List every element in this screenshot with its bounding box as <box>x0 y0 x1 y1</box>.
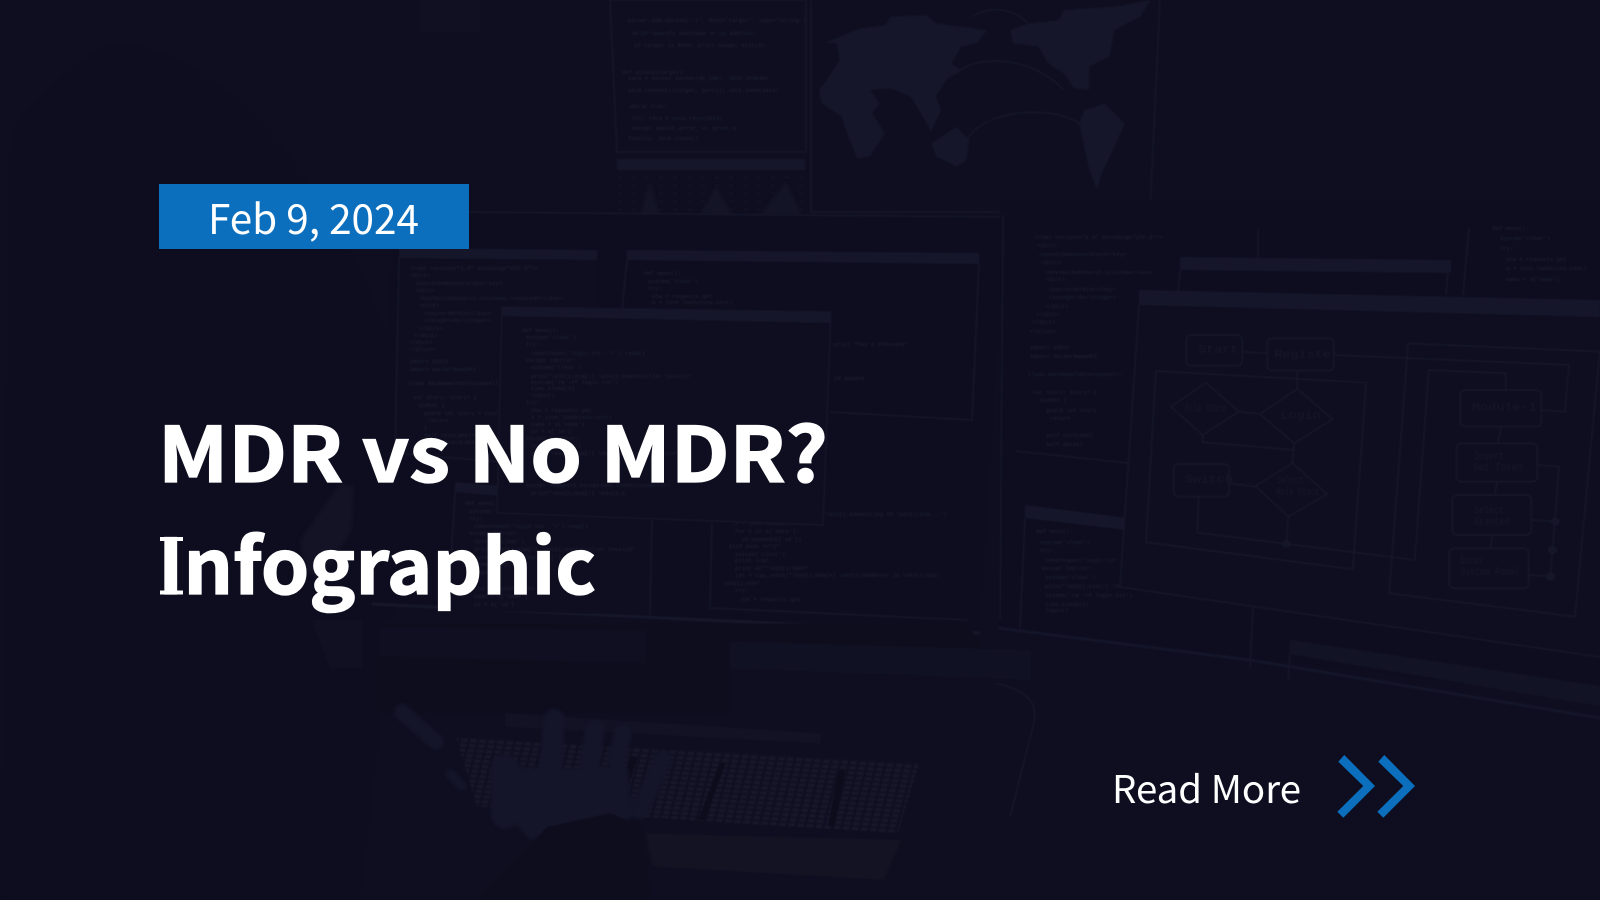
background: xml code panel: class HackNewsTableViewCell: U <box>408 380 509 387</box>
background: xml code panel: return <box>428 417 448 424</box>
title <box>158 394 828 616</box>
flowchart: Module-1 <box>1472 402 1537 414</box>
background: lower python panel: system('clear') <box>474 538 524 545</box>
xml panel on right monitor: <dict> <box>1045 276 1066 283</box>
background: centre code window: system('clear') <box>526 334 576 341</box>
background: upper python panel <box>622 250 979 420</box>
xml panel on right monitor: <dict> <box>1037 242 1058 249</box>
xml panel on right monitor: class HackNewsTableViewCell: <box>1028 371 1122 378</box>
background: centre code window: print"\033[1;91m[!] \033[1;9 <box>531 490 625 497</box>
top right python code: def menu(): <box>1492 225 1529 232</box>
background: centre code window: except requests.exceptions.ConnectionError: <box>526 482 670 489</box>
background: right monitor with flowchart: try: <box>1040 547 1053 554</box>
background: centre code window: nama = a['name'] <box>531 421 585 428</box>
background: upper code monitor: try: recv = sock.recv(1024) <box>632 115 723 122</box>
hand <box>402 712 663 840</box>
xml panel on right monitor: import HackerNewsAPI <box>1030 353 1097 360</box>
background: upper python panel: def menu(): <box>644 270 681 277</box>
background: upper code monitor: finally: sock.close() <box>628 135 698 142</box>
background: upper code monitor: sock = socket.socket(AF_INET, SOCK_STREAM) <box>628 75 769 82</box>
background: lower python panel: id = a['id'] <box>474 601 514 608</box>
behind panel header <box>1180 257 1451 273</box>
title: MDR vs No MDR? <box>158 394 828 504</box>
background: xml code panel: <dict> <box>415 287 436 294</box>
background: lower right code panel: elif peak =="2": <box>729 543 783 550</box>
background: centre code window: except IOError: <box>526 357 576 364</box>
background: upper code monitor: if target is None: print usage; exit(0) <box>634 42 765 49</box>
xml panel on right monitor: <key>orderHint</key> <box>1049 286 1117 293</box>
flowchart: Select <box>1474 504 1504 517</box>
background: right monitor with flowchart: def menu(): <box>1036 528 1073 535</box>
background: lower python panel: try: <box>469 515 482 522</box>
background: upper code monitor: def attack(target): <box>622 69 686 76</box>
background: right monitor with flowchart: except IOError: <box>1042 565 1092 572</box>
background: centre code window: print"\033[1;91m[!] \033[1;91mInstaller Invalid" <box>531 373 692 380</box>
background: xml code panel: import HackerNewsAPI <box>409 366 476 373</box>
background: centre code window: a = json.loads(otw.text) <box>531 414 612 421</box>
background: centre code window: login() <box>531 392 554 399</box>
top right python code: nama = a['name'] <box>1506 276 1560 283</box>
background: lower python panel: print"\033[1;91m[!] \033[1;91mInstaller Invalid" <box>474 546 635 553</box>
xml panel on right monitor: <dict> <box>1041 259 1062 266</box>
background: centre code window: system('clear') <box>531 442 581 449</box>
background: lower python panel: system('clear') <box>469 508 519 515</box>
sleeve <box>477 813 652 900</box>
flowchart: Register <box>1274 348 1339 361</box>
lower left panel header <box>1025 505 1128 530</box>
flowchart: Enter <box>1460 554 1484 567</box>
flowchart window <box>1120 290 1600 706</box>
background: lower right code panel: \033[1;97m" <box>723 580 760 587</box>
background: xml code panel: <integer>6</integer> <box>424 317 492 324</box>
background: lower python panel <box>448 482 652 615</box>
background: xml code panel: <dict> <box>410 272 431 279</box>
background: lower python panel: time.sleep(1) <box>474 561 518 568</box>
background: upper python panel: id.append <box>834 375 864 382</box>
background: lower right code panel <box>710 511 968 620</box>
background: upper python panel: system('clear') <box>648 278 698 285</box>
background: upper python panel: a = json.loads(otw.text) <box>652 299 733 306</box>
top right python code: otw = requests.get <box>1506 256 1566 263</box>
background: desk and keyboard <box>379 623 1035 880</box>
palm rest <box>645 833 901 880</box>
background: centre code window <box>497 307 831 525</box>
background: main monitor bezel <box>372 212 1005 640</box>
background: xml code panel: guard let story = story <box>424 410 502 417</box>
background: lower right code panel: print 42*"\033[1;96m=" <box>735 565 809 572</box>
background: lower python panel: otw = requests.get <box>474 585 534 592</box>
background: lower python panel: except IOError: <box>469 530 519 537</box>
background: lower python panel: try: <box>469 577 482 584</box>
background: lower right code panel: print logo <box>735 557 769 564</box>
xml panel on right monitor: </plist> <box>1030 328 1057 335</box>
xml panel on right monitor: guard let story <box>1046 407 1097 414</box>
background: lower right code panel: system('clear') <box>735 551 785 558</box>
flowchart: Role State <box>1185 403 1226 415</box>
background: centre code window: otw = requests.get <box>531 407 591 414</box>
background: lower python panel: system('rm -rf login.txt') <box>474 554 561 561</box>
background: xml code panel: self.textLabel?.text <box>424 432 491 439</box>
background: world map monitor <box>811 0 1160 212</box>
flowchart: Select <box>1276 474 1304 487</box>
background: right monitor with flowchart: login() <box>1045 607 1068 614</box>
background: xml code panel: </dict> <box>409 339 433 346</box>
background: xml code panel: import UIKit <box>409 358 449 365</box>
background: centre code window: system('rm -rf login.txt') <box>531 379 618 386</box>
background: xml code panel: </plist> <box>409 346 436 353</box>
flowchart: Start <box>1198 344 1239 356</box>
flowchart: Switch <box>1185 474 1233 486</box>
background: xml code panel: <key>SchemeUserState</key> <box>415 280 503 287</box>
background: centre code window: def menu(): <box>522 327 559 334</box>
background: lower python panel: toket=open('login.txt','r').read() <box>474 523 588 530</box>
flowchart: Role State <box>1276 486 1319 499</box>
date badge: Feb 9, 2024 <box>208 186 419 246</box>
background: xml code panel: self.detailLabel?. <box>424 439 484 446</box>
background: upper python panel: try: <box>648 285 661 292</box>
bottom strip panel <box>1289 640 1600 706</box>
background: lower right code panel: \033[1;93mGetting ID \033[1;97m...') <box>826 511 947 518</box>
background: right monitor with flowchart: system('rm -rf login.txt') <box>1045 592 1132 599</box>
background: upper python panel: otw = requests.get <box>652 293 712 300</box>
flowchart: Insert <box>1474 450 1504 463</box>
xml panel on right monitor: import UIKit <box>1030 344 1070 351</box>
background: centre code window: print"\033[1;91m[!] \033[1;93mToken invalid" <box>531 450 679 457</box>
background: right monitor with flowchart: time.sleep(1) <box>1045 601 1089 608</box>
top right python code: try: <box>1500 245 1513 252</box>
background: centre code window: try: <box>526 399 539 406</box>
title: Infographic <box>158 506 596 616</box>
background: upper python panel: print "has a thousand" <box>834 341 908 348</box>
background: centre code window: except KeyError: <box>526 435 580 442</box>
xml panel on right monitor <box>1000 215 1163 620</box>
xml panel on right monitor: <integer>6</integer> <box>1049 294 1117 301</box>
read more link <box>1112 755 1415 818</box>
background: xml code panel: } <box>424 425 427 432</box>
xml panel on right monitor: </dict> <box>1036 311 1060 318</box>
background: lower right code panel: id.append(k['id']) <box>741 536 801 543</box>
xml panel on right monitor: <?xml version="1.0" encoding="UTF-8"?> <box>1035 234 1163 241</box>
date badge <box>159 184 469 249</box>
background: lower python panel: nama = a['name'] <box>474 593 528 600</box>
background: xml code panel: <dict> <box>419 302 440 309</box>
flowchart <box>1146 335 1600 617</box>
xml panel on right monitor: var story: Story? { <box>1033 389 1097 396</box>
background: upper code monitor: sock.connect((target, port)); sock.send(data) <box>628 87 779 94</box>
background: upper code monitor: except socket.error, e: print e <box>632 125 736 132</box>
background: right monitor with flowchart <box>998 200 1600 718</box>
background: upper code monitor: help='specify hostname or ip address' <box>632 30 756 37</box>
top right python code <box>1258 225 1587 295</box>
background: right monitor with flowchart: system('clear') <box>1045 574 1095 581</box>
background: right monitor with flowchart: system('clear') <box>1040 539 1090 546</box>
background: xml code panel: <key>orderHint</key> <box>424 310 492 317</box>
background: lower right code panel: for k in a['data']: <box>735 528 799 535</box>
icon: double chevron arrow <box>1337 755 1415 818</box>
xml panel on right monitor: didSet { <box>1040 397 1067 404</box>
xml panel on right monitor: self.textLabel <box>1046 432 1094 439</box>
flowchart: Granted <box>1474 516 1510 529</box>
background: centre code window: system('clear') <box>531 364 581 371</box>
background: upper code monitor: while True: <box>630 103 667 110</box>
background: centre code window: try: <box>526 341 539 348</box>
background: xml code panel: <?xml version="1.0" encoding="UTF-8"?> <box>410 265 538 272</box>
top right python code: system('clear') <box>1500 235 1550 242</box>
background: centre code window: id = a['id'] <box>531 428 571 435</box>
background: right monitor with flowchart: print"\033[1;91m[!] \033[1;91mInstaller Invalid" <box>1045 583 1206 590</box>
xml panel on right monitor: <key>GitHubSearch.xcscheme</key> <box>1045 269 1153 276</box>
xml panel on right monitor: self.detail <box>1046 441 1084 448</box>
xml panel on right monitor: </dict> <box>1045 303 1069 310</box>
flowchart: Get Token <box>1473 462 1523 474</box>
background: right monitor with flowchart: toket=open('login.txt','r') <box>1045 557 1136 564</box>
keyboard <box>456 737 919 833</box>
background: upper code monitor <box>610 0 806 215</box>
xml panel on right monitor: <key>SchemeUserState</key> <box>1039 251 1127 258</box>
xml panel on right monitor: </dict> <box>1032 319 1056 326</box>
background: xml code panel: didSet { <box>418 402 445 409</box>
background: xml code panel: </dict> <box>414 332 438 339</box>
background: lower right code panel: idt = raw_input("\033[1;96m[+] \033[1;93mEnter ID \033[1;91m: <box>735 572 940 579</box>
background: operator silhouette <box>0 0 480 900</box>
top right python code: a = json.loads(otw.text) <box>1506 265 1587 272</box>
read more link: Read More <box>1112 759 1301 814</box>
background: lower right code panel: z = json.loads(r.text) <box>735 520 809 527</box>
background: lower python panel: login() <box>474 569 498 576</box>
background: lower right code panel: try: <box>735 587 748 594</box>
background: xml code panel: <key>GitHubSearch.xcscheme_^#shared#^</key> <box>419 295 564 302</box>
background: centre code window: time.sleep(1) <box>531 385 575 392</box>
background: centre code window: toket=open('login.txt','r').read() <box>531 350 645 357</box>
flowchart: System Panel <box>1460 566 1520 579</box>
background: lower python panel: def menu(): <box>465 500 502 507</box>
background: upper code monitor: parser.add_option('-t', dest='target', type='string') <box>628 17 806 24</box>
background: xml code panel: </dict> <box>419 325 443 332</box>
background: xml code panel <box>395 248 597 470</box>
flowchart: Login <box>1280 409 1321 422</box>
xml panel on right monitor: return <box>1050 415 1070 422</box>
background: xml code panel: var story: Story? { <box>413 394 477 401</box>
background: lower right code panel: jok = requests.get <box>740 596 800 603</box>
